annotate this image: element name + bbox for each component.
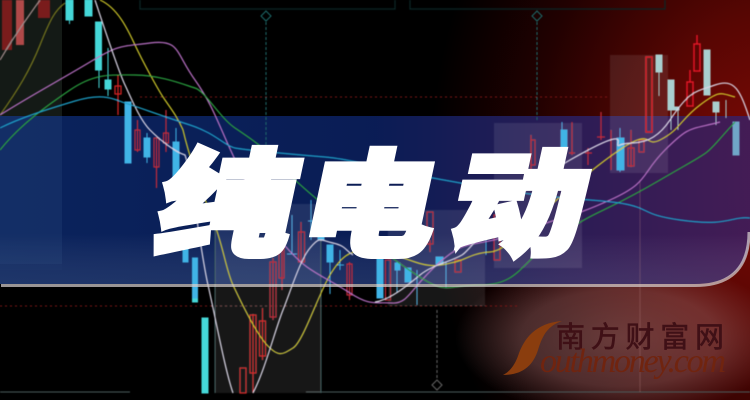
red and pink outlined candles <box>115 75 644 393</box>
logo swoosh <box>503 321 562 375</box>
logo chinese name: 南方财富网 <box>556 321 724 354</box>
blue candles inside panel <box>125 102 624 305</box>
panel bottom highlight edge <box>1 232 749 286</box>
title: 纯 <box>146 142 308 271</box>
title <box>146 142 600 271</box>
panel: translucent title band <box>0 116 750 284</box>
bright red candles, right <box>646 35 700 132</box>
pale candles, right <box>656 50 739 155</box>
highlight boxes <box>215 55 668 393</box>
faded red candles, top left <box>2 0 50 50</box>
title: 动 <box>441 143 600 271</box>
logo: southmoney <box>503 321 726 380</box>
teal candles <box>66 0 208 393</box>
logo url: outhmoney.com <box>540 343 726 380</box>
title: 电 <box>292 143 451 271</box>
